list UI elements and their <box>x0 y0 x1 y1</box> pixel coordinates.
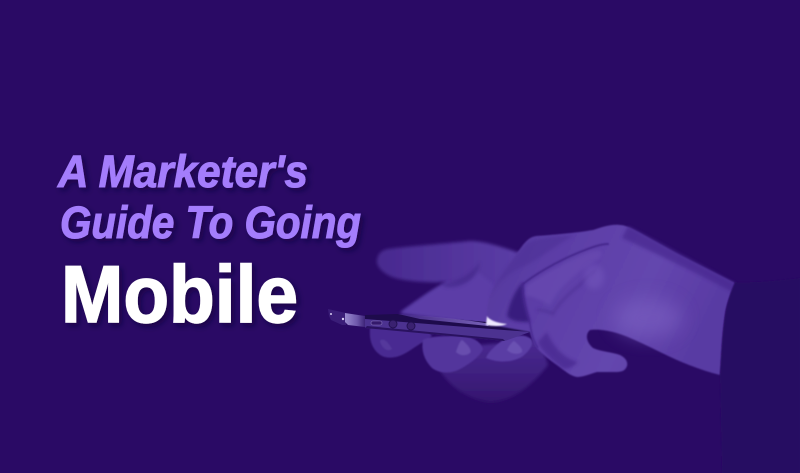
phone top edge <box>365 314 530 333</box>
sleeve <box>720 278 800 473</box>
second finger highlight <box>526 251 602 305</box>
first finger shade <box>507 282 530 322</box>
icon: left hand, fingers under phone <box>370 328 532 372</box>
hands holding phone <box>328 225 800 473</box>
back of hand highlight <box>614 298 682 338</box>
icon: left hand, lower palm <box>440 340 548 402</box>
hand wrist edge shade <box>622 226 735 292</box>
icon: right hand <box>487 225 735 377</box>
thumb shade <box>538 332 578 369</box>
finger crease between first and second fingers <box>523 244 608 284</box>
heading line 3: Mobile <box>61 250 298 340</box>
icon: left hand, index finger and palm <box>377 241 520 326</box>
hand base shape <box>487 225 735 377</box>
phone screen reflection <box>398 314 490 326</box>
phone side <box>365 319 530 341</box>
icon: screen glow under fingertip <box>486 316 507 326</box>
third finger crease <box>537 270 596 314</box>
heading line 1: A Marketer's <box>57 146 308 197</box>
heading line 2: Guide To Going <box>60 197 361 248</box>
phone <box>328 309 530 341</box>
title <box>57 146 361 340</box>
second finger edge <box>523 284 538 348</box>
phone metal band <box>345 313 365 327</box>
phone corner <box>328 309 346 325</box>
phone buttons <box>371 321 382 325</box>
